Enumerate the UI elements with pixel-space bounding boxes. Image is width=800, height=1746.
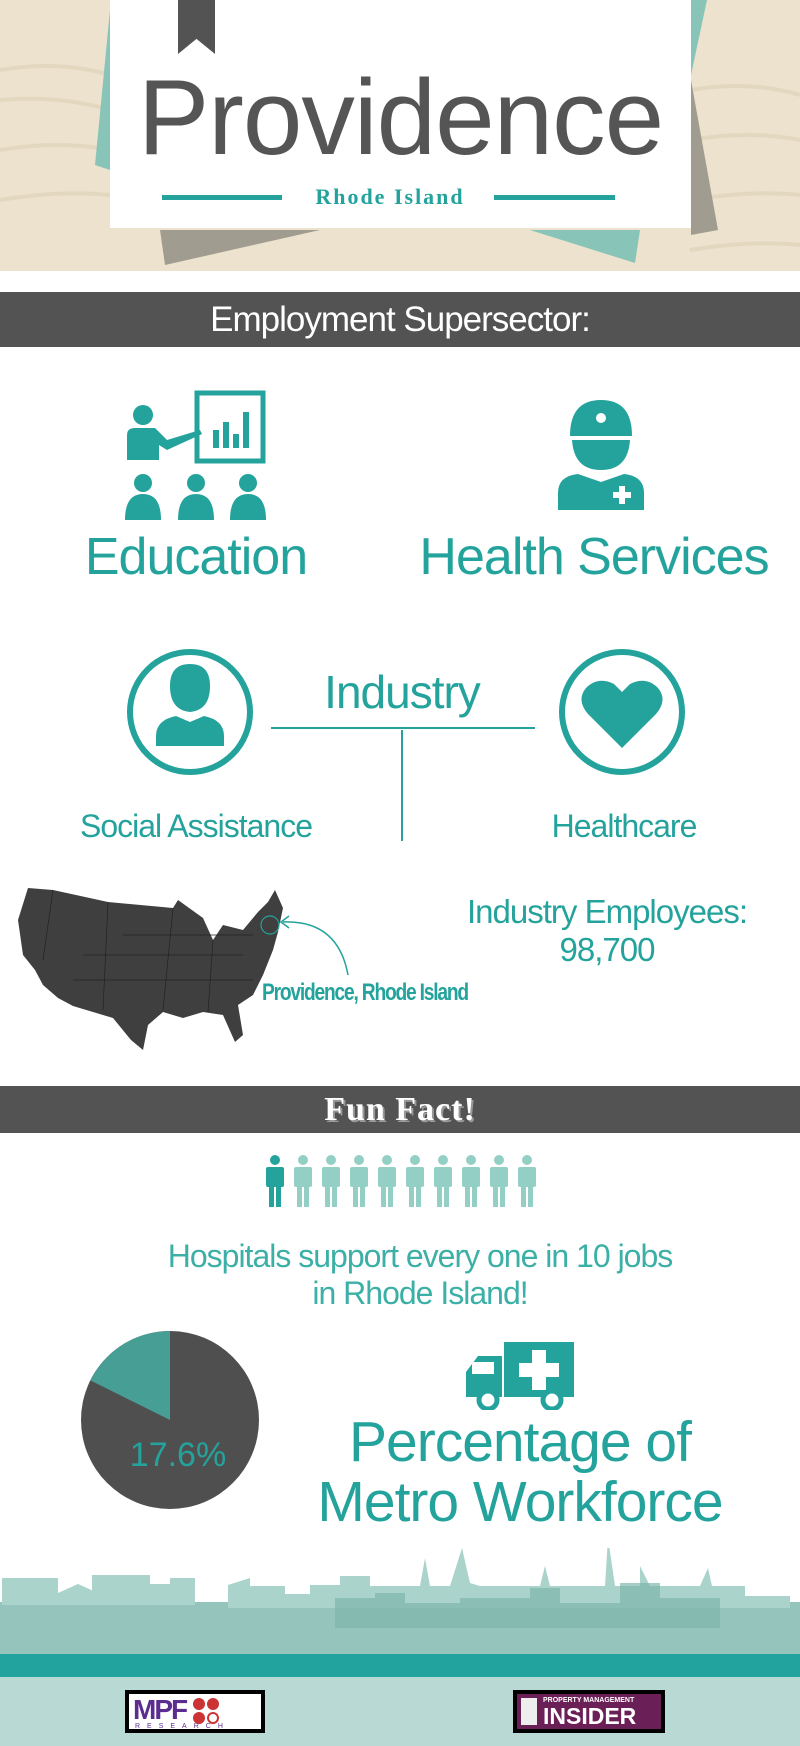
teal band (0, 1654, 800, 1677)
icon row: people (266, 1155, 536, 1207)
text: percentage of metro workforce: Metro Workforce (317, 1470, 723, 1534)
logo: MPF research (125, 1690, 265, 1733)
text: industry employees: 98,700 (560, 931, 654, 968)
heading bar: Fun Fact (0, 1086, 800, 1133)
map: USA with label (18, 888, 468, 1050)
logo: MPF research: RESEARCH (135, 1723, 230, 1730)
icon: bookmark ribbon (178, 0, 215, 54)
text: Healthcare: Healthcare (552, 808, 696, 844)
pie chart (81, 1331, 259, 1509)
logo: property management insider: INSIDER (543, 1703, 636, 1729)
skyline (0, 1548, 800, 1654)
text: Social Assistance: Social Assistance (80, 808, 312, 844)
subtitle: Rhode Island: Rhode Island (315, 184, 465, 209)
icon: social assistance circle (127, 649, 253, 775)
logo: property management insider: PROPERTY MANAGEMENT (543, 1697, 634, 1704)
text: Health Services: Health Services (419, 528, 769, 586)
heading bar: Fun Fact: Fun Fact! (324, 1091, 476, 1128)
text: map label: Providence, Rhode Island (262, 979, 468, 1006)
pie chart: 17.6% (130, 1436, 226, 1474)
icon: health worker (558, 400, 644, 510)
title card (110, 0, 691, 228)
subtitle: Rhode Island (162, 184, 615, 209)
text: industry employees: Industry Employees: (467, 893, 747, 930)
heading bar: Employment Supersector: Employment Supersector: (210, 300, 590, 339)
logo: property management insider (513, 1690, 665, 1733)
text: Education: Education (85, 528, 307, 586)
text: industry employees (467, 893, 747, 968)
logo: MPF research: MPF (133, 1694, 186, 1725)
title: Providence (138, 57, 663, 177)
heading bar: Employment Supersector (0, 292, 800, 347)
text: hospitals fun fact (168, 1238, 672, 1311)
icon: education (125, 390, 266, 520)
connector lines (271, 727, 535, 729)
icon: healthcare heart circle (559, 649, 685, 775)
text: hospitals fun fact: in Rhode Island! (312, 1275, 528, 1311)
text: hospitals fun fact: Hospitals support every one in 10 jobs (168, 1238, 672, 1274)
text: percentage of metro workforce: Percentage of (349, 1410, 691, 1474)
footer (0, 1677, 800, 1746)
text: Industry: Industry (324, 666, 480, 718)
icon: ambulance (466, 1342, 574, 1410)
header background (0, 0, 800, 271)
text: percentage of metro workforce (317, 1410, 723, 1534)
